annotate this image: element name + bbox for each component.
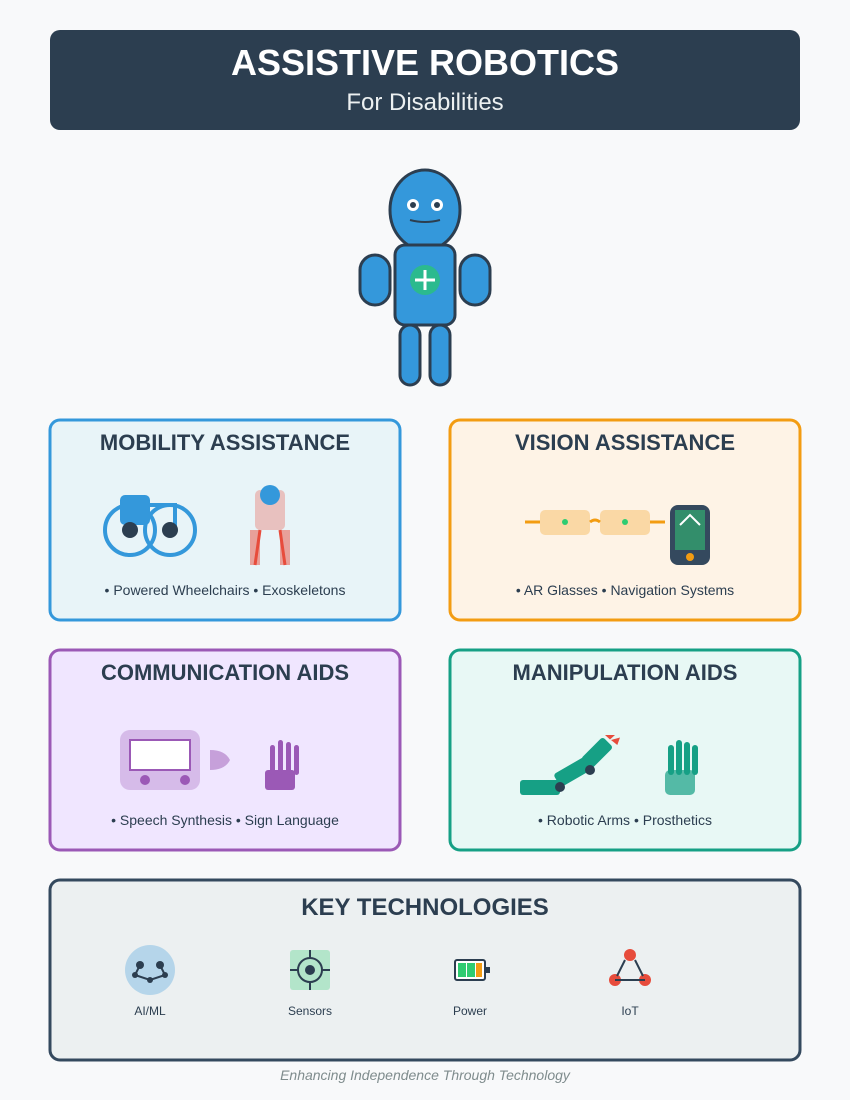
sensors label: Sensors xyxy=(288,1004,332,1018)
icon: IoT network xyxy=(609,949,651,986)
icon: AR glasses xyxy=(525,510,665,535)
icon: sign language hand xyxy=(265,740,299,790)
communication caption: • Speech Synthesis • Sign Language xyxy=(111,812,339,828)
title: ASSISTIVE ROBOTICS xyxy=(231,42,619,83)
central robot illustration xyxy=(360,170,490,385)
panel: vision assistance xyxy=(450,420,800,620)
icon: AI/ML network xyxy=(125,945,175,995)
IoT label: IoT xyxy=(621,1004,639,1018)
footer tagline: Enhancing Independence Through Technology xyxy=(280,1067,571,1083)
icon: speech device xyxy=(120,730,230,790)
icon: prosthetic hand xyxy=(665,740,698,795)
vision heading: VISION ASSISTANCE xyxy=(515,430,735,455)
vision caption: • AR Glasses • Navigation Systems xyxy=(516,582,734,598)
power label: Power xyxy=(453,1004,487,1018)
mobility caption: • Powered Wheelchairs • Exoskeletons xyxy=(105,582,345,598)
key technologies heading: KEY TECHNOLOGIES xyxy=(301,894,549,921)
subtitle: For Disabilities xyxy=(346,89,504,116)
icon: sensor target xyxy=(290,950,330,990)
mobility heading: MOBILITY ASSISTANCE xyxy=(100,430,350,455)
icon: wheelchair xyxy=(105,495,195,555)
manipulation heading: MANIPULATION AIDS xyxy=(513,660,737,685)
manipulation caption: • Robotic Arms • Prosthetics xyxy=(538,812,712,828)
icon: robotic arm xyxy=(520,735,620,795)
panel: key technologies xyxy=(50,880,800,1060)
AI/ML label: AI/ML xyxy=(134,1004,166,1018)
panel: communication aids xyxy=(50,650,400,850)
header banner xyxy=(50,30,800,130)
panel: mobility assistance xyxy=(50,420,400,620)
communication heading: COMMUNICATION AIDS xyxy=(101,660,349,685)
icon: battery xyxy=(455,960,490,980)
icon: exoskeleton xyxy=(250,485,290,565)
icon: navigation phone xyxy=(670,505,710,565)
panel: manipulation aids xyxy=(450,650,800,850)
